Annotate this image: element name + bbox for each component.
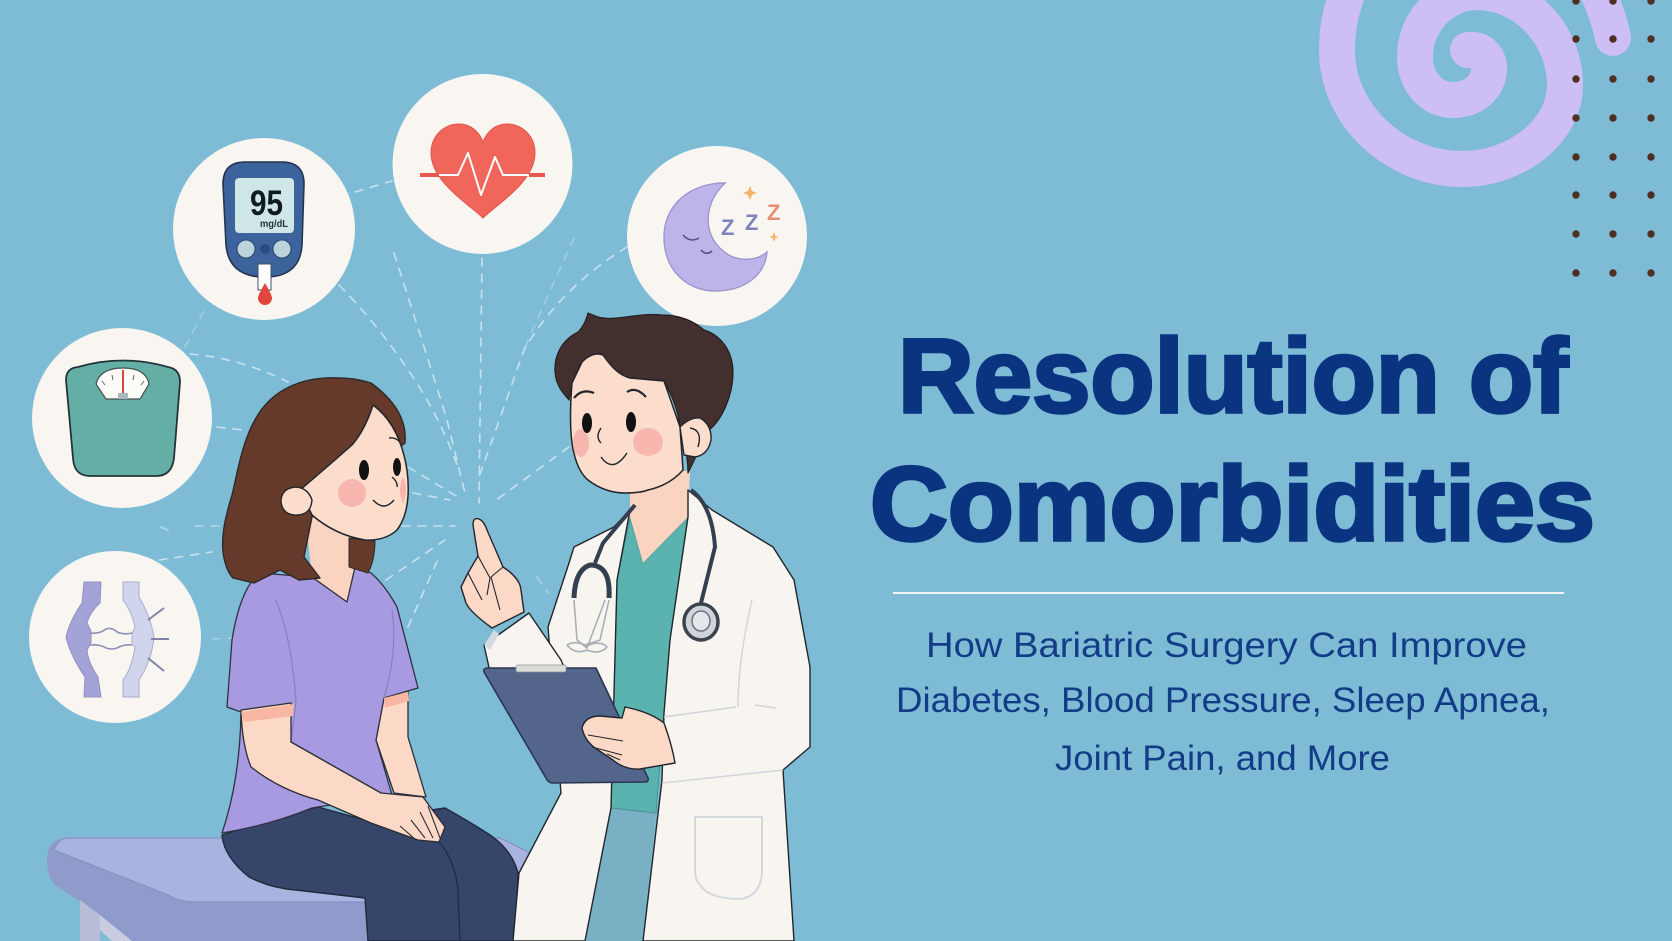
doctor holding hand: [582, 707, 675, 769]
title: [870, 318, 1595, 563]
clipboard: [484, 668, 648, 783]
doctor neck: [630, 470, 690, 563]
icon: crescent moon with sleep Zs: Z: [721, 215, 734, 240]
exam bench: [47, 838, 530, 941]
patient shirt: [222, 567, 418, 833]
doctor hair: [555, 313, 733, 473]
doctor face: [570, 354, 683, 493]
stethoscope: [567, 490, 718, 652]
patient ear: [281, 487, 312, 515]
doctor sleeve raised: [484, 613, 566, 672]
subtitle: How Bariatric Surgery Can Improve: [926, 626, 1527, 665]
decorative dot grid: [1572, 0, 1655, 277]
patient near arm and clasped hands: [241, 703, 445, 842]
icon: crescent moon with sleep Zs: Z: [767, 200, 780, 225]
patient navy trousers: [222, 807, 518, 941]
icon: heart with ECG: [392, 74, 572, 254]
doctor coat right side: [643, 490, 810, 941]
subtitle: [896, 626, 1550, 778]
title: Resolution of: [898, 318, 1569, 435]
dashed connector lines from icons to the conversation: [159, 181, 627, 639]
patient neck: [305, 513, 355, 602]
icon: glucose meter reading 95 mg/dL: 95: [250, 184, 283, 223]
subtitle: Joint Pain, and More: [1055, 739, 1390, 778]
doctor in white coat: [461, 313, 810, 941]
doctor cuff: [484, 630, 499, 650]
doctor teal scrubs: [611, 517, 688, 813]
doctor pointing hand: [461, 519, 524, 628]
icon: glucose meter reading 95 mg/dL: mg/dL: [260, 218, 289, 230]
coat pocket: [695, 817, 762, 899]
patient seated in lilac shirt: [222, 378, 518, 941]
decorative lilac spiral: [1337, 0, 1613, 169]
subtitle: Diabetes, Blood Pressure, Sleep Apnea,: [896, 681, 1550, 720]
doctor trousers: [585, 808, 656, 941]
patient face: [300, 405, 408, 540]
patient long brown hair: [223, 378, 405, 583]
icon: glucose meter reading 95 mg/dL: [173, 138, 355, 320]
icon: knee joint: [29, 551, 201, 723]
title: Comorbidities: [870, 446, 1595, 563]
doctor coat left side: [513, 510, 630, 941]
patient far arm: [376, 690, 426, 797]
icon: crescent moon with sleep Zs: Z: [745, 210, 758, 235]
icon: weighing scale: [32, 328, 212, 508]
icon: crescent moon with sleep Zs: [627, 146, 807, 326]
